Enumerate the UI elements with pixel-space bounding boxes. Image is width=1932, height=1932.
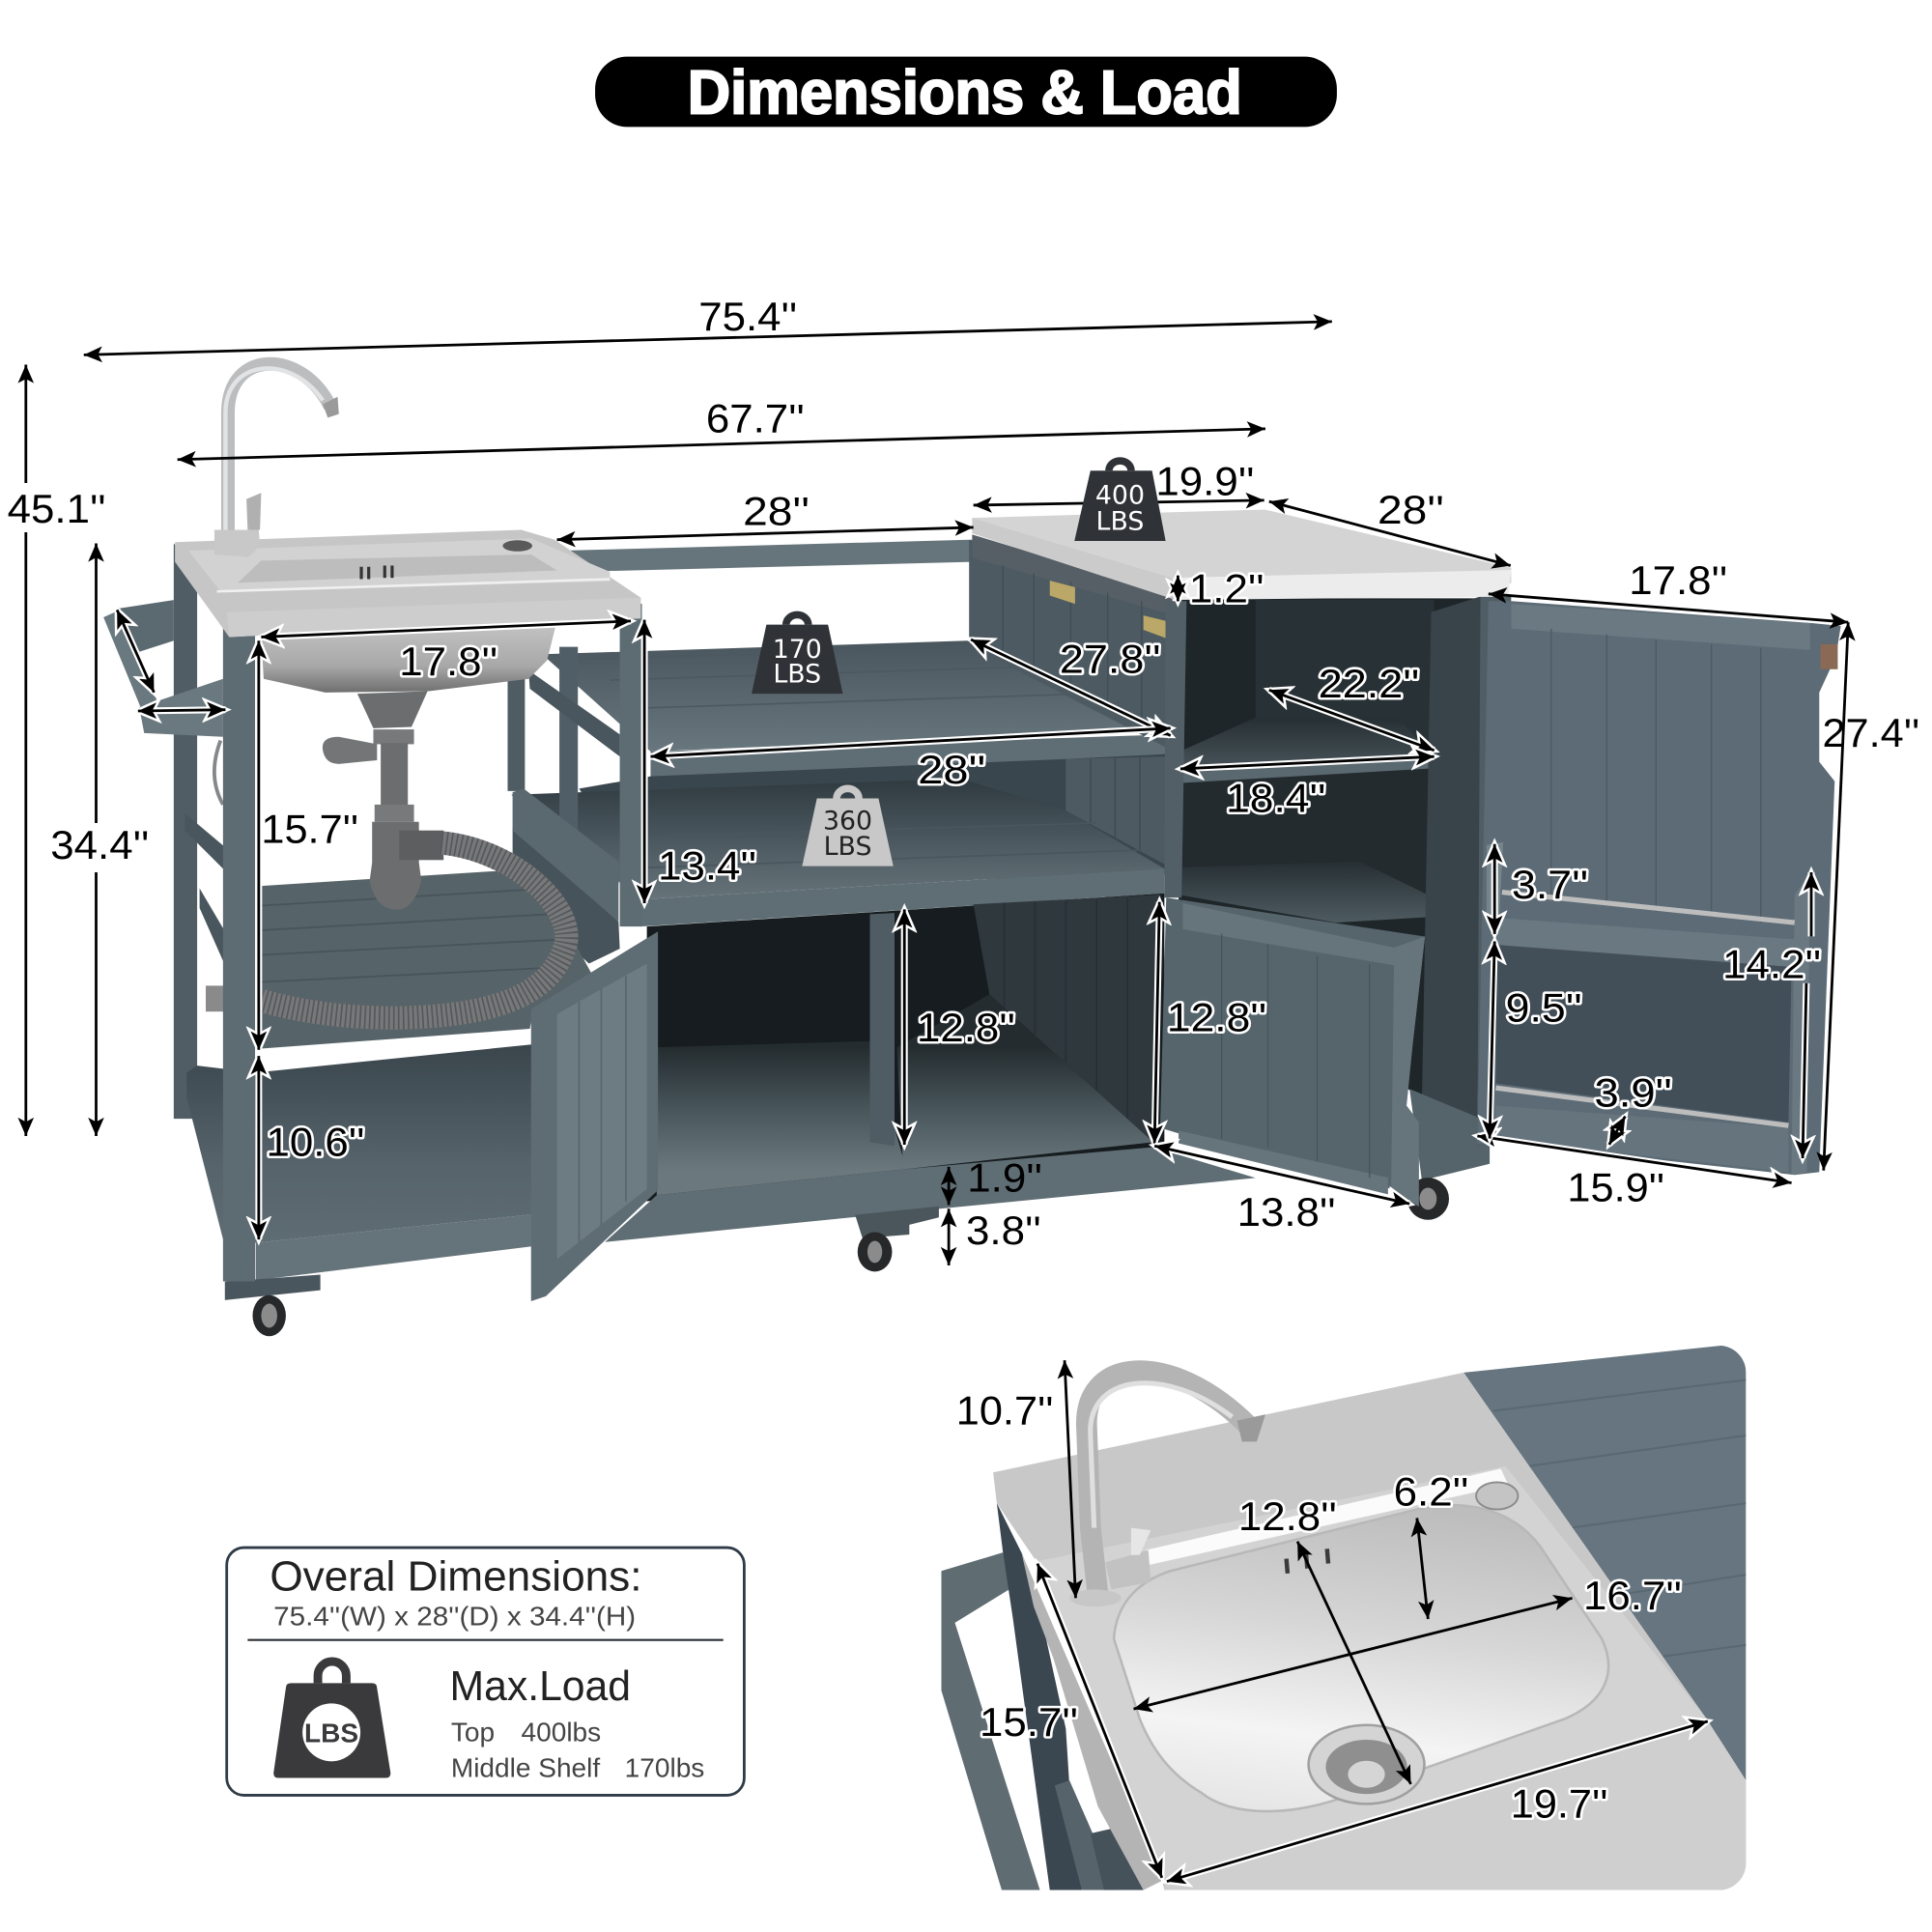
arrow: detail 10.7 <box>1065 1360 1076 1598</box>
label: detail 19.7: 19.7'' <box>1511 1780 1608 1826</box>
stainless counter <box>972 509 1511 600</box>
label: 75.4: 75.4'' <box>698 294 797 339</box>
stainless top <box>175 529 640 637</box>
front legs <box>223 610 255 1282</box>
drain pipes <box>323 692 443 910</box>
center caster <box>855 1207 939 1271</box>
text: top load: Top <box>451 1717 495 1747</box>
drain hose <box>261 842 566 1018</box>
side rails <box>185 813 224 870</box>
label: 3.8: 3.8'' <box>966 1208 1041 1253</box>
sink flange <box>1037 1466 1707 1879</box>
weight icon: 400 lbs: 400 <box>1095 481 1145 511</box>
arrow: 3.7 <box>1492 844 1497 934</box>
arrow: detail 15.7 <box>1037 1564 1162 1878</box>
heading: overall dimensions: Overal Dimensions: <box>270 1554 642 1601</box>
label: detail 12.8: 12.8'' <box>1238 1493 1337 1539</box>
title banner: Dimensions & Load <box>688 57 1242 127</box>
weight icon: 400 lbs <box>1074 461 1166 541</box>
arrow: 1.2 thickness <box>1176 576 1180 601</box>
towel rack <box>103 600 223 737</box>
arrow: 22.2 <box>1269 690 1435 751</box>
inner side panel <box>1422 595 1484 1127</box>
weight icon: 360 lbs <box>802 788 894 867</box>
arrow: 28 top <box>557 527 974 540</box>
label: detail 10.7: 10.7'' <box>956 1387 1054 1433</box>
weight icon: 170 lbs: LBS <box>773 660 821 690</box>
arrow: 14.2 <box>1803 872 1811 1158</box>
label: detail 15.7: 15.7'' <box>980 1699 1078 1745</box>
arrow: 17.8 door <box>1489 594 1848 622</box>
label: detail 6.2: 6.2'' <box>1394 1469 1468 1515</box>
sink unit <box>103 543 620 1119</box>
label: 13.8: 13.8'' <box>1237 1189 1336 1235</box>
lower door <box>1160 897 1425 1207</box>
arrow: 13.8 <box>1154 1146 1409 1204</box>
arrow: 45.1 height <box>25 365 27 1136</box>
weight icon: 170 lbs: 170 <box>773 635 822 665</box>
label: 15.9: 15.9'' <box>1567 1165 1664 1210</box>
label: 22.2: 22.2'' <box>1319 661 1419 706</box>
label: 12.8 right: 12.8'' <box>1167 995 1266 1040</box>
label: 13.4: 13.4'' <box>658 843 756 889</box>
panel: overall dimensions and max load <box>227 1548 744 1795</box>
back left leg <box>174 543 197 1119</box>
arrow: towel bar width <box>138 710 225 711</box>
interior shelves <box>1179 718 1432 923</box>
label: 45.1: 45.1'' <box>8 486 106 531</box>
weight icon: 360 lbs: LBS <box>824 832 871 862</box>
label: 67.7: 67.7'' <box>706 396 805 441</box>
side wall with hinges <box>969 534 1173 751</box>
text: middle shelf load: 170lbs <box>625 1752 704 1782</box>
arrow: 1.9 <box>948 1167 950 1205</box>
arrow: 3.9 <box>1609 1117 1625 1145</box>
text: middle shelf load: Middle Shelf <box>451 1752 600 1782</box>
large open door <box>1477 601 1841 1175</box>
arrow: 12.8 center <box>901 909 907 1145</box>
label: 10.6: 10.6'' <box>267 1119 365 1164</box>
weight icon: 400 lbs: LBS <box>1096 506 1144 536</box>
arrow: 13.4 <box>641 620 647 903</box>
right cabinet <box>969 509 1841 1220</box>
arrow: detail 12.8 <box>1297 1542 1410 1784</box>
heading: max load: Max.Load <box>450 1663 631 1710</box>
label: 17.8 door: 17.8'' <box>1629 557 1727 603</box>
label: 3.7: 3.7'' <box>1512 862 1588 907</box>
center cabinet section <box>511 540 1256 1271</box>
arrow: 15.7 <box>256 640 262 1050</box>
faucet <box>214 364 339 557</box>
arrow: 17.8 sink <box>261 621 631 637</box>
arrow: 28 right <box>1269 501 1511 565</box>
open door left <box>531 931 658 1301</box>
arrow: 19.9 <box>974 500 1264 505</box>
wood shelf side wall <box>513 828 620 963</box>
arrow: detail 6.2 <box>1417 1518 1428 1619</box>
label: 18.4: 18.4'' <box>1226 776 1325 821</box>
drain strainer <box>1309 1725 1424 1804</box>
arrow: towel bar depth <box>117 610 154 693</box>
arrow: 67.7 width <box>178 429 1265 460</box>
label: 1.2: 1.2'' <box>1189 566 1264 611</box>
label: 15.7: 15.7'' <box>261 806 358 851</box>
overflow slots <box>1287 1548 1328 1574</box>
label: 19.9: 19.9'' <box>1155 459 1254 504</box>
icon: LBS weight: LBS <box>304 1719 358 1748</box>
label: 9.5: 9.5'' <box>1506 984 1582 1030</box>
label: 28 top: 28'' <box>743 488 810 533</box>
wood top <box>1463 1343 1746 1780</box>
label: 28 right: 28'' <box>1378 487 1444 532</box>
label: 12.8 center: 12.8'' <box>917 1005 1015 1050</box>
bottom shelf <box>186 1044 533 1242</box>
label: 27.8: 27.8'' <box>1060 636 1161 681</box>
left frame wood <box>941 1552 1040 1890</box>
middle shelf <box>261 870 591 1048</box>
label: 34.4: 34.4'' <box>50 822 149 867</box>
arrow: 18.4 <box>1180 756 1435 769</box>
arrow: 27.4 door height <box>1824 622 1848 1171</box>
arrow: 75.4 width <box>84 322 1332 355</box>
text: overall size: 75.4''(W) x 28''(D) x 34.4''(H) <box>273 1601 636 1631</box>
steel surface <box>993 1373 1746 1890</box>
arrow: 10.6 <box>256 1056 262 1239</box>
sink unit lower <box>186 1044 533 1336</box>
arrow: 15.9 <box>1477 1136 1792 1182</box>
text: top load: 400lbs <box>522 1717 601 1747</box>
detail panel: sink close-up <box>941 1343 1746 1890</box>
sink bowl and plumbing <box>175 364 658 1301</box>
label: 27.4: 27.4'' <box>1822 710 1919 755</box>
basin <box>1114 1505 1608 1811</box>
post <box>1164 601 1186 897</box>
weight icon: 170 lbs <box>752 614 842 694</box>
arrow: 9.5 <box>1490 941 1494 1139</box>
label: 17.8 sink: 17.8'' <box>399 639 497 684</box>
arrow: 27.8 <box>971 639 1171 735</box>
tap-hole cap <box>1476 1482 1518 1509</box>
arrow: detail 16.7 <box>1133 1598 1573 1709</box>
interior dark <box>1179 598 1484 1127</box>
arrow: 28 shelf <box>650 728 1171 756</box>
arrow: detail 19.7 <box>1167 1721 1708 1882</box>
icon: LBS weight <box>273 1662 390 1778</box>
label: 3.9: 3.9'' <box>1595 1069 1672 1115</box>
label: detail 16.7: 16.7'' <box>1583 1573 1682 1618</box>
rear posts and rails <box>508 653 525 791</box>
arrow: 12.8 right <box>1154 902 1159 1144</box>
faucet close-up <box>1069 1371 1265 1606</box>
weight icon: 360 lbs: 360 <box>823 806 872 836</box>
label: 28 center: 28'' <box>918 747 985 792</box>
arrow: 3.8 <box>948 1208 950 1265</box>
label: 14.2: 14.2'' <box>1722 942 1821 987</box>
label: 1.9: 1.9'' <box>967 1154 1042 1200</box>
arrow: 34.4 height <box>95 543 98 1136</box>
